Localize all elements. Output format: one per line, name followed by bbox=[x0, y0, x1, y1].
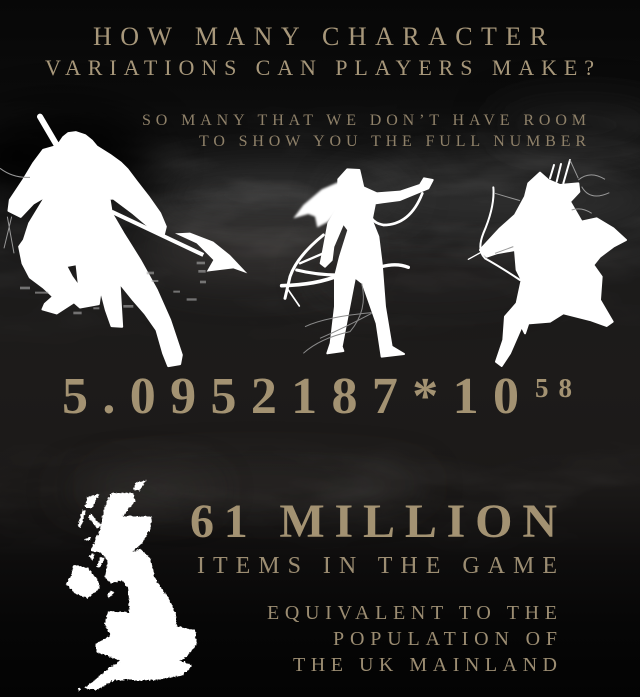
comparison text: THE UK MAINLAND bbox=[293, 654, 557, 676]
comparison text: POPULATION OF bbox=[333, 628, 557, 650]
heading: VARIATIONS CAN PLAYERS MAKE? bbox=[45, 55, 594, 80]
heading bbox=[45, 22, 594, 80]
stat: items: 61 MILLION bbox=[190, 495, 557, 548]
subheading: TO SHOW YOU THE FULL NUMBER bbox=[199, 133, 586, 150]
comparison text: EQUIVALENT TO THE bbox=[267, 602, 557, 624]
silhouette: mage with ribbons bbox=[282, 169, 433, 357]
silhouette: warrior with axe bbox=[0, 117, 247, 366]
subheading: SO MANY THAT WE DON’T HAVE ROOM bbox=[142, 112, 586, 129]
heading: HOW MANY CHARACTER bbox=[93, 22, 548, 51]
exponent: 58 bbox=[535, 373, 582, 403]
subheading bbox=[142, 112, 586, 150]
background bbox=[0, 102, 640, 540]
big number: 5.0952187*10 bbox=[62, 368, 519, 425]
comparison text bbox=[267, 602, 557, 676]
map: UK silhouette bbox=[67, 480, 195, 690]
silhouette: archer bbox=[468, 160, 626, 366]
stat label: ITEMS IN THE GAME bbox=[197, 553, 557, 579]
stat: items bbox=[190, 495, 557, 579]
